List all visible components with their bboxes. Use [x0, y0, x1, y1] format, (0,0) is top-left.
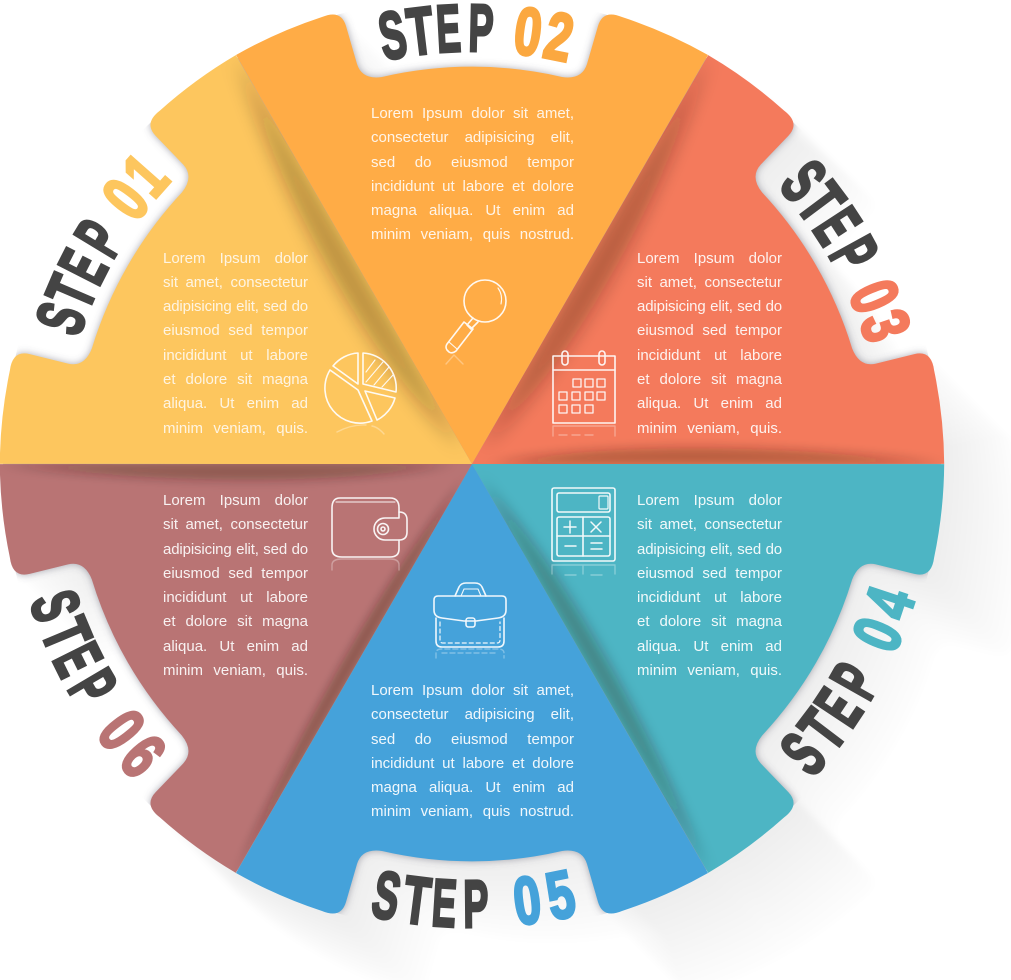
- text block: step 01: incididunt ut labore: [163, 347, 308, 364]
- panel: step 06 wedge: [0, 260, 590, 893]
- text block: step 03: et dolore sit magna: [637, 371, 782, 388]
- label: STEP 01: S: [21, 294, 101, 343]
- label: STEP 03: T: [783, 170, 859, 236]
- text block: step 02: [371, 105, 574, 243]
- text block: step 02: magna aliqua. Ut enim ad: [371, 202, 574, 219]
- text block: step 04: incididunt ut labore: [637, 589, 782, 606]
- label: STEP 03: E: [799, 196, 875, 257]
- label: STEP 01: P: [61, 208, 138, 268]
- text block: step 01: [163, 250, 308, 437]
- icon: calculator: [552, 488, 615, 575]
- text block: step 04: aliqua. Ut enim ad: [637, 638, 782, 655]
- text block: step 04: et dolore sit magna: [637, 613, 782, 630]
- text block: step 03: sit amet, consectetur: [637, 274, 782, 291]
- label: STEP 04: E: [801, 677, 877, 739]
- label: STEP 06: P: [54, 658, 132, 717]
- text block: step 03: incididunt ut labore: [637, 347, 782, 364]
- text block: step 02: incididunt ut labore et dolore: [371, 178, 574, 195]
- label: STEP 05: E: [430, 866, 459, 942]
- text block: step 06: adipisicing elit, sed do: [163, 541, 308, 558]
- text block: step 06: eiusmod sed tempor: [163, 565, 308, 582]
- text block: step 04: sit amet, consectetur: [637, 516, 782, 533]
- label: STEP 06: 6: [106, 722, 179, 791]
- icon: calendar: [553, 351, 615, 436]
- text block: step 06: [163, 492, 308, 679]
- text block: step 03: minim veniam, quis.: [637, 420, 782, 437]
- text block: step 02: minim veniam, quis nostrud.: [371, 226, 574, 243]
- label: STEP 04: 0: [839, 608, 918, 662]
- text block: step 01: sit amet, consectetur: [163, 274, 308, 291]
- label: STEP 06: 0: [83, 697, 159, 764]
- label: STEP 01: 0: [88, 166, 164, 233]
- text block: step 05: minim veniam, quis nostrud.: [371, 803, 574, 820]
- label: STEP 05: T: [399, 861, 435, 939]
- label: STEP 05: [367, 856, 581, 942]
- label: STEP 04: P: [816, 651, 894, 710]
- label: STEP 04: [766, 578, 930, 788]
- text block: step 01: eiusmod sed tempor: [163, 322, 308, 339]
- text block: step 05: magna aliqua. Ut enim ad: [371, 779, 574, 796]
- label: STEP 05: 0: [509, 862, 545, 940]
- text block: step 02: consectetur adipisicing elit,: [371, 129, 574, 146]
- label: STEP 06: S: [16, 581, 96, 630]
- icon: pie chart: [325, 353, 396, 434]
- text block: step 05: sed do eiusmod tempor: [371, 731, 574, 748]
- panel: step 01 wedge: [0, 35, 590, 668]
- text block: step 01: et dolore sit magna: [163, 371, 308, 388]
- icon: wallet: [332, 498, 407, 570]
- text block: step 05: consectetur adipisicing elit,: [371, 706, 574, 723]
- text block: step 04: minim veniam, quis.: [637, 662, 782, 679]
- label: STEP 03: P: [815, 225, 893, 283]
- label: STEP 03: S: [766, 146, 841, 215]
- text block: step 01: aliqua. Ut enim ad: [163, 395, 308, 412]
- panel: step 03 wedge: [354, 35, 979, 668]
- icon: magnifying glass: [446, 280, 506, 364]
- panel: step 05 wedge: [236, 464, 708, 914]
- text block: step 06: incididunt ut labore: [163, 589, 308, 606]
- label: STEP 03: 0: [834, 270, 914, 323]
- text block: step 04: [637, 492, 782, 679]
- panel: step 02 wedge: [236, 14, 708, 464]
- label: STEP 04: 4: [850, 578, 930, 628]
- label: STEP 04: T: [784, 697, 860, 763]
- text block: step 05: incididunt ut labore et dolore: [371, 755, 574, 772]
- text block: step 01: minim veniam, quis.: [163, 420, 308, 437]
- label: STEP 03: 3: [845, 301, 925, 350]
- label: STEP 01: 1: [109, 141, 183, 210]
- text block: step 05: [371, 682, 574, 820]
- text block: step 04: Lorem Ipsum dolor: [637, 492, 782, 509]
- text block: step 03: adipisicing elit, sed do: [637, 298, 782, 315]
- text block: step 03: eiusmod sed tempor: [637, 322, 782, 339]
- label: STEP 03: [766, 146, 925, 350]
- text block: step 03: aliqua. Ut enim ad: [637, 395, 782, 412]
- text block: step 02: sed do eiusmod tempor: [371, 154, 574, 171]
- text block: step 03: [637, 250, 782, 437]
- label: STEP 05: 5: [540, 856, 581, 935]
- label: STEP 04: S: [766, 719, 840, 788]
- icon: briefcase: [434, 583, 506, 658]
- text block: step 06: et dolore sit magna: [163, 613, 308, 630]
- text block: step 03: Lorem Ipsum dolor: [637, 250, 782, 266]
- label: STEP 05: P: [463, 866, 489, 942]
- text block: step 05: Lorem Ipsum dolor sit amet,: [371, 682, 574, 699]
- label: STEP 05: S: [367, 856, 407, 935]
- text block: step 06: minim veniam, quis.: [163, 662, 308, 679]
- text block: step 04: adipisicing elit, sed do: [637, 541, 782, 558]
- label: STEP 01: E: [45, 239, 122, 295]
- label: STEP 06: E: [39, 633, 116, 687]
- text block: step 02: Lorem Ipsum dolor sit amet,: [371, 105, 574, 122]
- label: STEP 06: T: [27, 608, 106, 661]
- text block: step 06: sit amet, consectetur: [163, 516, 308, 533]
- text block: step 01: adipisicing elit, sed do: [163, 298, 308, 315]
- label: STEP 02: 2: [538, 0, 579, 77]
- fold shadows between wedges: [0, 55, 944, 873]
- label: STEP 01: [21, 141, 183, 343]
- label: STEP 02: [373, 0, 579, 77]
- text block: step 01: Lorem Ipsum dolor: [163, 250, 308, 266]
- panel: step 04 wedge: [354, 260, 979, 893]
- text block: step 04: eiusmod sed tempor: [637, 565, 782, 582]
- text block: step 06: aliqua. Ut enim ad: [163, 638, 308, 655]
- text block: step 06: Lorem Ipsum dolor: [163, 492, 308, 509]
- label: STEP 01: T: [31, 265, 111, 319]
- label: STEP 06: [16, 581, 179, 791]
